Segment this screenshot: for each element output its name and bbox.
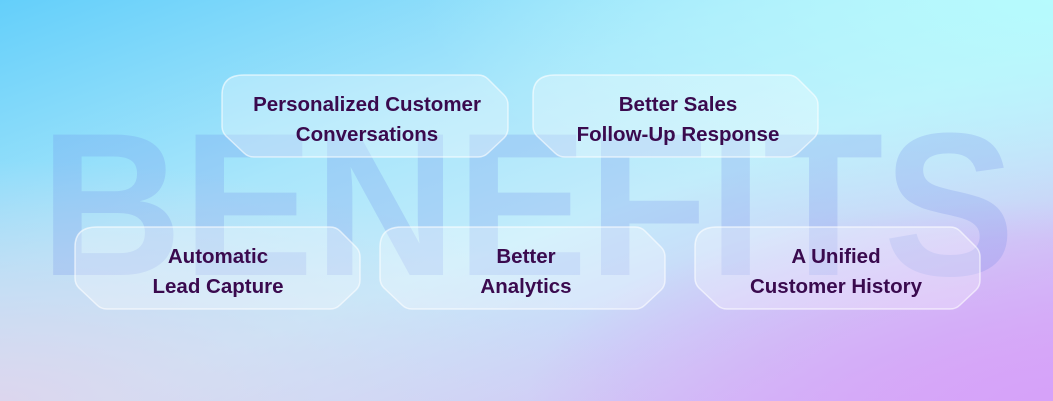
card: A Unified Customer History: A Unified [791,245,881,268]
card: Personalized Customer Conversations: Conversations [296,123,438,146]
card: Automatic Lead Capture: Lead Capture [152,275,284,298]
card: Automatic Lead Capture: Automatic [168,245,268,268]
watermark: BENEFITS: BENEFITS [40,91,1015,319]
card: Personalized Customer Conversations: Personalized Customer [253,93,481,116]
card: Better Sales Follow-Up Response: Follow-Up Response [577,123,779,146]
card: Better Analytics: Better [496,245,556,268]
card: Better Analytics: Analytics [480,275,572,298]
card: Better Analytics [380,227,665,309]
card: Personalized Customer Conversations [222,75,508,157]
card: Better Sales Follow-Up Response [533,75,818,157]
card: A Unified Customer History [695,227,980,309]
card: A Unified Customer History: Customer History [750,275,923,298]
card: Automatic Lead Capture [75,227,360,309]
card: Better Sales Follow-Up Response: Better Sales [619,93,737,116]
